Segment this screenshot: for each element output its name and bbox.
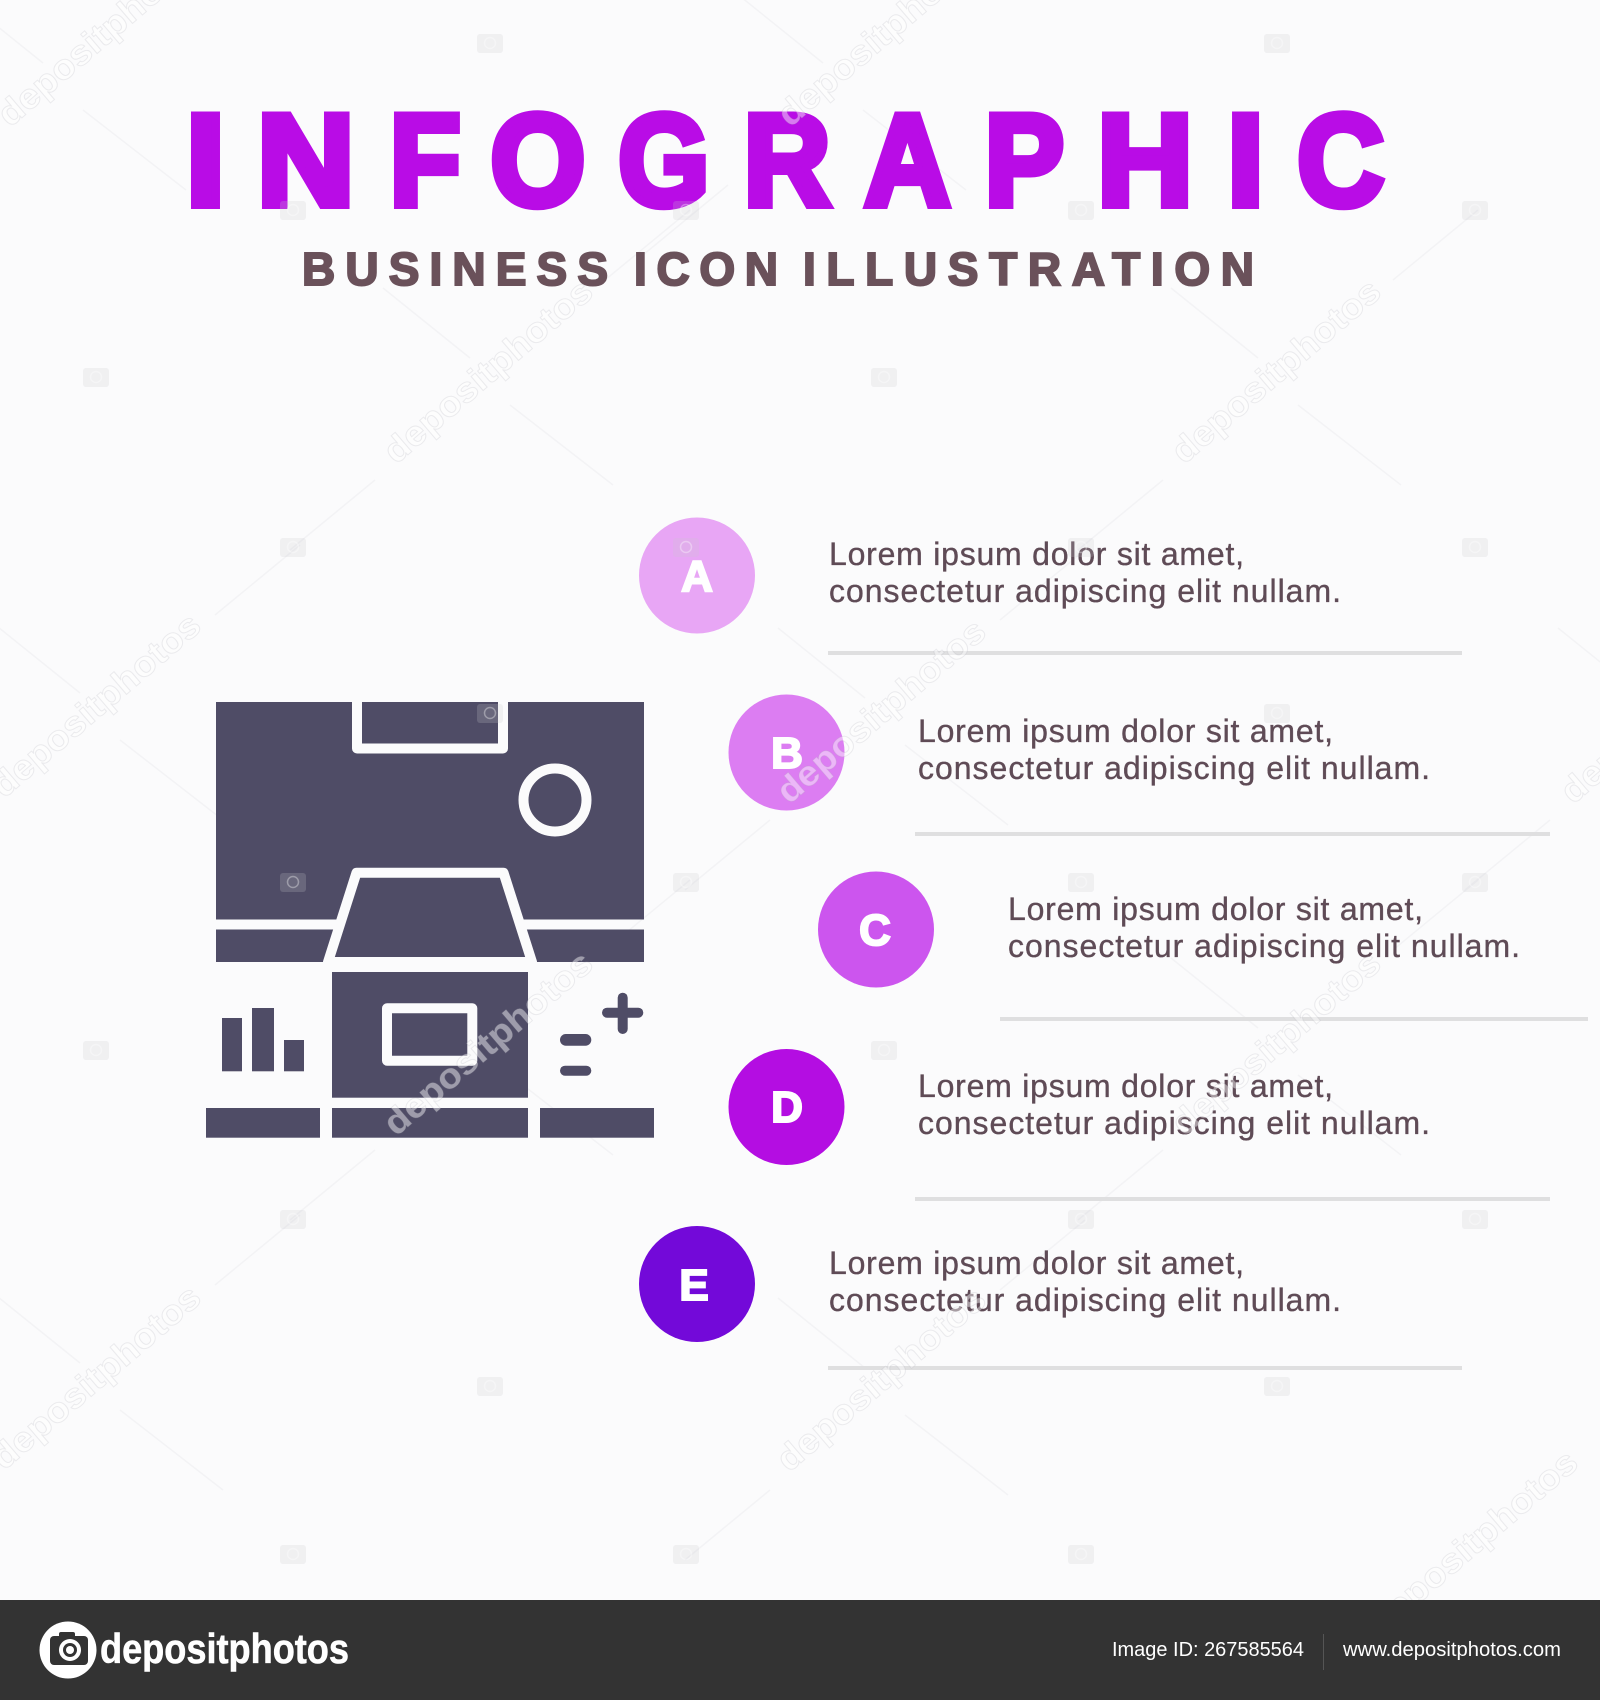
text C: Lorem ipsum dolor sit amet,: [1008, 891, 1423, 927]
footer logo icon: [40, 1622, 96, 1678]
website url: www.depositphotos.com: [1342, 1639, 1561, 1661]
text B: Lorem ipsum dolor sit amet,: [918, 713, 1333, 749]
text A: consectetur adipiscing elit nullam.: [829, 573, 1341, 609]
text D: Lorem ipsum dolor sit amet,: [918, 1068, 1333, 1104]
subtitle: BUSINESS: [302, 243, 608, 295]
watermark overlay: depositphotos: [769, 611, 993, 811]
circle E: [639, 1226, 755, 1342]
trapezoid outline: [328, 873, 532, 962]
text E: consectetur adipiscing elit nullam.: [829, 1282, 1341, 1318]
box body: [332, 972, 528, 1098]
monitor base band: [216, 930, 644, 962]
title: F: [390, 87, 461, 233]
letter C: C: [859, 906, 891, 955]
title: O: [490, 87, 585, 233]
divider E: [828, 1366, 1462, 1370]
divider B: [915, 832, 1550, 836]
base segments: [206, 1108, 654, 1138]
title: C: [1297, 87, 1384, 233]
subtitle: ICON: [634, 243, 778, 295]
title: R: [744, 87, 830, 233]
notch outline: [357, 702, 503, 748]
subtitle: ILLUSTRATION: [803, 243, 1254, 295]
letter B: B: [771, 729, 803, 778]
image id: Image ID: 267585564: [1112, 1639, 1304, 1661]
watermark overlay: depositphotos: [376, 943, 600, 1143]
watermark overlay: depositphotos: [1164, 943, 1388, 1143]
footer logo wordmark: depositphotos: [100, 1625, 349, 1672]
box window: [387, 1008, 472, 1061]
bar chart: [222, 1008, 304, 1071]
letter A: A: [681, 552, 713, 601]
step B: [728, 694, 1550, 836]
text D: consectetur adipiscing elit nullam.: [918, 1105, 1430, 1141]
icon: monitor with printer and charts: [206, 702, 654, 1138]
plus and minus symbols: [560, 993, 643, 1076]
gap below trapezoid: [320, 962, 540, 972]
watermark overlay: depositphotos: [1361, 1442, 1585, 1642]
title: N: [257, 87, 354, 233]
step D: [728, 1049, 1550, 1201]
step A: [639, 518, 1462, 655]
step E: [639, 1226, 1462, 1370]
text C: consectetur adipiscing elit nullam.: [1008, 928, 1520, 964]
camera circle: [524, 768, 586, 832]
letter D: D: [771, 1083, 803, 1132]
monitor screen: [216, 702, 644, 920]
text A: Lorem ipsum dolor sit amet,: [829, 536, 1244, 572]
title: I: [1227, 87, 1264, 233]
circle B: [728, 694, 844, 810]
title: G: [618, 87, 709, 233]
watermark overlay: depositphotos: [1164, 271, 1388, 471]
divider A: [828, 651, 1462, 655]
letter E: E: [679, 1261, 709, 1310]
title: A: [865, 87, 950, 233]
step C: [818, 872, 1588, 1021]
divider D: [915, 1197, 1550, 1201]
circle C: [818, 872, 934, 988]
circle D: [728, 1049, 844, 1165]
divider C: [1000, 1017, 1588, 1021]
circle A: [639, 518, 755, 634]
text B: consectetur adipiscing elit nullam.: [918, 750, 1430, 786]
footer bar: [0, 1600, 1600, 1700]
title: P: [985, 87, 1064, 233]
title: H: [1097, 87, 1193, 233]
watermark overlay: depositphotos: [769, 1279, 993, 1479]
text E: Lorem ipsum dolor sit amet,: [829, 1245, 1244, 1281]
watermark overlay: depositphotos: [376, 271, 600, 471]
title: I: [186, 87, 225, 233]
